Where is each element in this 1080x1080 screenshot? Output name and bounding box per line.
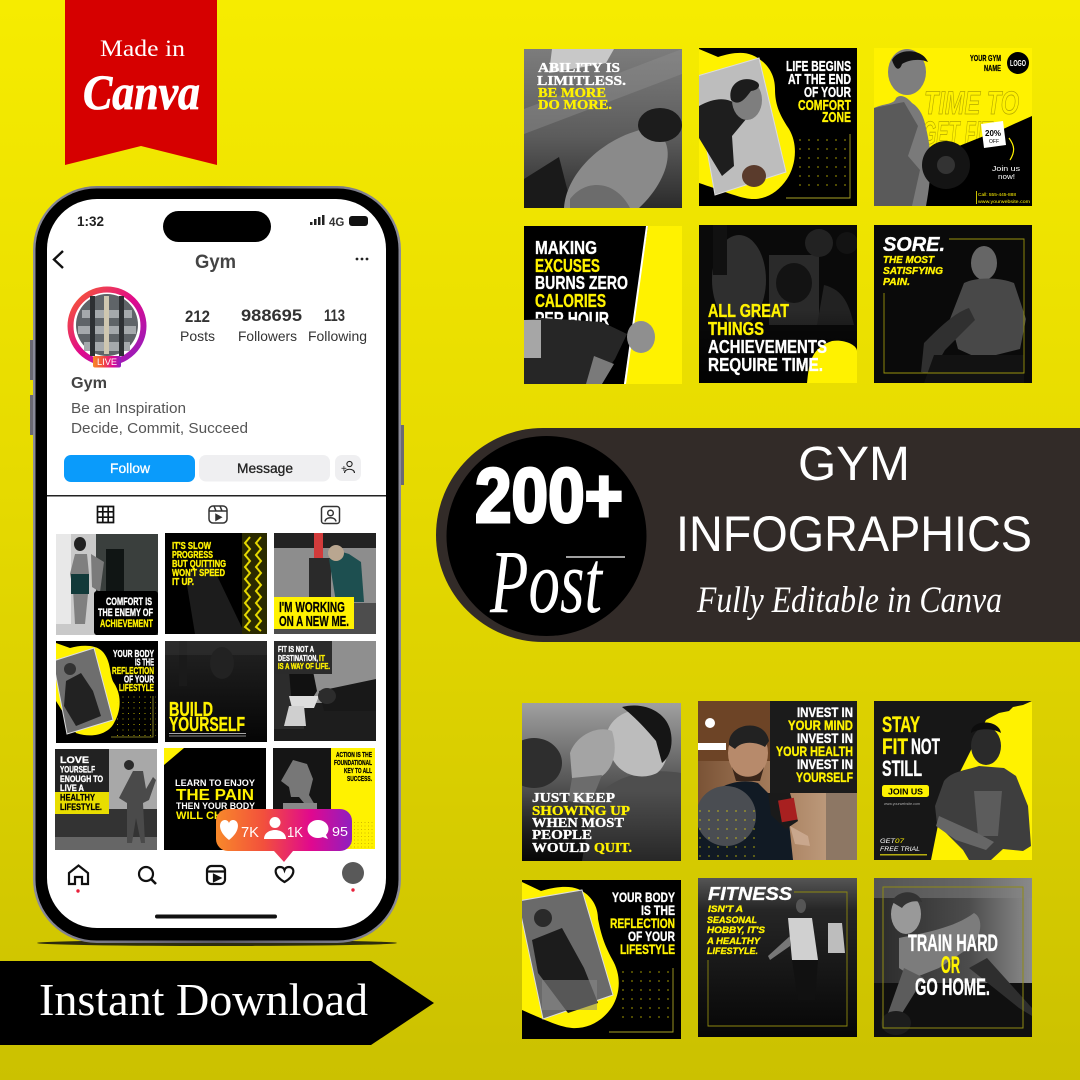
tile: sore: PAIN. xyxy=(883,277,910,288)
grid post: learn to enjoy the pain: LEARN TO ENJOY xyxy=(175,778,255,788)
grid post: your body reflection xyxy=(56,641,158,743)
engagement bubble: 95 xyxy=(332,824,348,839)
profile stats: Following xyxy=(308,328,367,344)
tile: stay fit not still: JOIN US xyxy=(888,788,924,796)
grid post: fit is not a destination xyxy=(274,641,376,741)
buttons: Follow, Message, add: Message xyxy=(237,461,293,476)
black circle: 200+ Post: 200+ xyxy=(475,453,623,539)
tile: your body reflection xyxy=(522,880,681,1039)
tile: fitness: ISN'T A xyxy=(708,904,743,914)
grid post: slow progress: PROGRESS xyxy=(172,550,213,561)
tile: time to get fit: OFF xyxy=(989,139,999,145)
tile: fitness: LIFESTYLE. xyxy=(707,946,758,956)
tile: time to get fit xyxy=(874,48,1032,206)
badge text: Canva: Canva xyxy=(83,64,200,120)
tile: time to get fit: 20% xyxy=(985,129,1001,138)
tile: stay fit not still: GET xyxy=(880,839,897,845)
instant download arrow banner xyxy=(0,961,434,1045)
status bar: 1:32 xyxy=(77,213,104,229)
tile: just keep showing up: WHEN MOST xyxy=(532,815,624,830)
tile: time to get fit: Join us xyxy=(992,164,1020,173)
tile: ability is limitless: BE MORE xyxy=(538,85,606,100)
grid post: learn to enjoy the pain: THE PAIN xyxy=(176,787,254,804)
grid post: fit is not a destination: IT xyxy=(319,653,326,663)
profile stats xyxy=(180,306,367,344)
grid post: slow progress xyxy=(165,533,267,634)
grid post: love yourself: LIVE A xyxy=(60,783,84,794)
tile: stay fit not still: 07 xyxy=(895,839,905,845)
tile: stay fit not still xyxy=(874,701,1032,860)
badge text: Made in: Made in xyxy=(100,36,186,61)
tile: making excuses: PER HOUR xyxy=(535,308,609,329)
tile: making excuses: MAKING xyxy=(535,237,597,258)
grid post: love yourself: YOURSELF xyxy=(60,764,95,776)
grid post: slow progress: BUT QUITTING xyxy=(172,559,226,570)
grid post: working on a new me xyxy=(274,533,376,634)
tile: making excuses xyxy=(524,226,682,384)
tile: ability is limitless: ABILITY IS xyxy=(538,60,620,75)
tile: stay fit not still: STILL xyxy=(882,756,922,781)
profile avatar with live badge: LIVE xyxy=(97,357,117,368)
grid post: slow progress: WON'T SPEED xyxy=(172,568,225,579)
tile: life begins xyxy=(699,48,857,206)
grid post: learn to enjoy the pain: THEN YOUR BODY xyxy=(176,801,255,811)
tile: fitness: HOBBY, IT'S xyxy=(707,925,765,935)
grid post: build yourself xyxy=(165,641,267,742)
tile: stay fit not still: FREE TRIAL xyxy=(880,847,920,853)
grid post: learn to enjoy the pain xyxy=(164,748,266,850)
profile stats: Posts xyxy=(180,328,215,344)
tile: stay fit not still: www.yourwebsite.com xyxy=(884,802,920,806)
grid post: comfort xyxy=(56,534,158,635)
black circle: 200+ Post: Post xyxy=(489,533,603,632)
grid post: slow progress: IT'S SLOW xyxy=(172,541,211,552)
tile: all great things: ALL GREAT xyxy=(708,301,789,321)
tile: all great things: THINGS xyxy=(708,319,764,339)
bottom navigation xyxy=(69,862,364,893)
header: back arrow, title, menu xyxy=(54,251,368,273)
profile stats: 113 xyxy=(324,306,345,325)
buttons: Follow, Message, add: Follow xyxy=(110,461,150,476)
tile: time to get fit: Call: 555-445-888 xyxy=(978,192,1017,197)
tile: fitness: FITNESS xyxy=(708,884,792,904)
tile: just keep showing up: PEOPLE xyxy=(532,827,592,842)
black circle: 200+ Post xyxy=(446,436,646,636)
grid post: fit is not a destination: DESTINATION, xyxy=(278,653,318,663)
tile: train hard or go home: OR xyxy=(941,952,960,979)
tile: all great things: REQUIRE TIME. xyxy=(708,355,823,375)
profile avatar with live badge xyxy=(70,290,144,368)
grid post: love yourself: ENOUGH TO xyxy=(60,774,103,785)
tile: stay fit not still: NOT xyxy=(911,734,940,759)
grid post: action is the foundational key xyxy=(273,748,375,849)
tile: sore: SORE. xyxy=(883,234,945,256)
tile: just keep showing up: QUIT. xyxy=(594,840,632,855)
buttons: Follow, Message, add: + xyxy=(341,464,347,475)
tile: train hard or go home xyxy=(874,878,1032,1037)
tile: making excuses: BURNS ZERO xyxy=(535,272,628,293)
tile: time to get fit: now! xyxy=(998,172,1015,181)
status bar xyxy=(77,211,368,242)
bio: Decide, Commit, Succeed xyxy=(71,421,248,437)
profile stats: 212 xyxy=(185,307,210,326)
tile: time to get fit: www.yourwebsite.com xyxy=(978,199,1030,204)
tile: invest in xyxy=(698,701,857,860)
tile: time to get fit: YOUR GYM xyxy=(970,53,1001,63)
subtitle: Fully Editable in Canva: Fully Editable in Canva xyxy=(696,580,1002,621)
tile: time to get fit: NAME xyxy=(984,63,1001,73)
grid post: fit is not a destination: IS A WAY OF LIFE. xyxy=(278,661,330,671)
profile stats: 988695 xyxy=(241,306,302,325)
bio: Be an Inspiration xyxy=(71,401,186,417)
tile: stay fit not still: STAY xyxy=(882,712,920,737)
grid post: build yourself: BUILD xyxy=(169,699,213,721)
grid post: love yourself: HEALTHY xyxy=(60,792,96,804)
bio: Gym xyxy=(71,375,107,392)
grid post: fit is not a destination: FIT IS NOT A xyxy=(278,644,314,654)
instant download arrow banner: Instant Download xyxy=(39,974,368,1025)
buttons: Follow, Message, add xyxy=(64,455,361,482)
grid post: love yourself: LOVE xyxy=(60,755,89,766)
phone mockup xyxy=(30,186,404,946)
title: GYM: GYM xyxy=(798,438,910,491)
central title band xyxy=(436,428,1080,642)
grid post: slow progress: IT UP. xyxy=(172,577,194,588)
tile: sore: THE MOST xyxy=(883,255,935,266)
grid post: love yourself xyxy=(55,749,157,850)
tile: fitness xyxy=(698,878,857,1037)
engagement bubble: 1K xyxy=(287,824,303,841)
tab icons xyxy=(98,506,340,524)
bio xyxy=(71,375,248,437)
tile: ability is limitless: DO MORE. xyxy=(538,97,612,112)
tile: all great things xyxy=(699,225,857,383)
tile: stay fit not still: FIT xyxy=(882,734,908,759)
tile: all great things: ACHIEVEMENTS xyxy=(708,337,827,357)
badge: Made in Canva ribbon xyxy=(65,0,217,165)
title: INFOGRAPHICS: INFOGRAPHICS xyxy=(676,506,1032,562)
tile: just keep showing up xyxy=(522,703,681,861)
grid post: working on a new me: I'M WORKING xyxy=(279,599,345,616)
tile: fitness: SEASONAL xyxy=(707,915,757,925)
tile: just keep showing up: JUST KEEP xyxy=(532,790,615,805)
status bar: 4G xyxy=(329,217,344,229)
tile: fitness: A HEALTHY xyxy=(706,936,761,946)
tile: sore: SATISFYING xyxy=(883,266,943,277)
engagement bubble xyxy=(216,809,352,862)
tile: ability is limitless: LIMITLESS. xyxy=(537,73,626,88)
tile: ability is limitless xyxy=(524,49,682,208)
home indicator xyxy=(155,914,277,918)
tile: making excuses: CALORIES xyxy=(535,290,606,311)
grid post: learn to enjoy the pain: WILL CHANGE xyxy=(176,810,254,822)
tile: making excuses: EXCUSES xyxy=(535,255,600,276)
tile: just keep showing up: SHOWING UP xyxy=(532,803,630,818)
tile: sore xyxy=(874,225,1032,383)
header: back arrow, title, menu: Gym xyxy=(195,252,236,273)
profile stats: Followers xyxy=(238,328,297,344)
engagement bubble: 7K xyxy=(241,824,259,841)
grid post: love yourself: LIFESTYLE. xyxy=(60,802,102,813)
tile: just keep showing up: WOULD xyxy=(532,840,590,855)
